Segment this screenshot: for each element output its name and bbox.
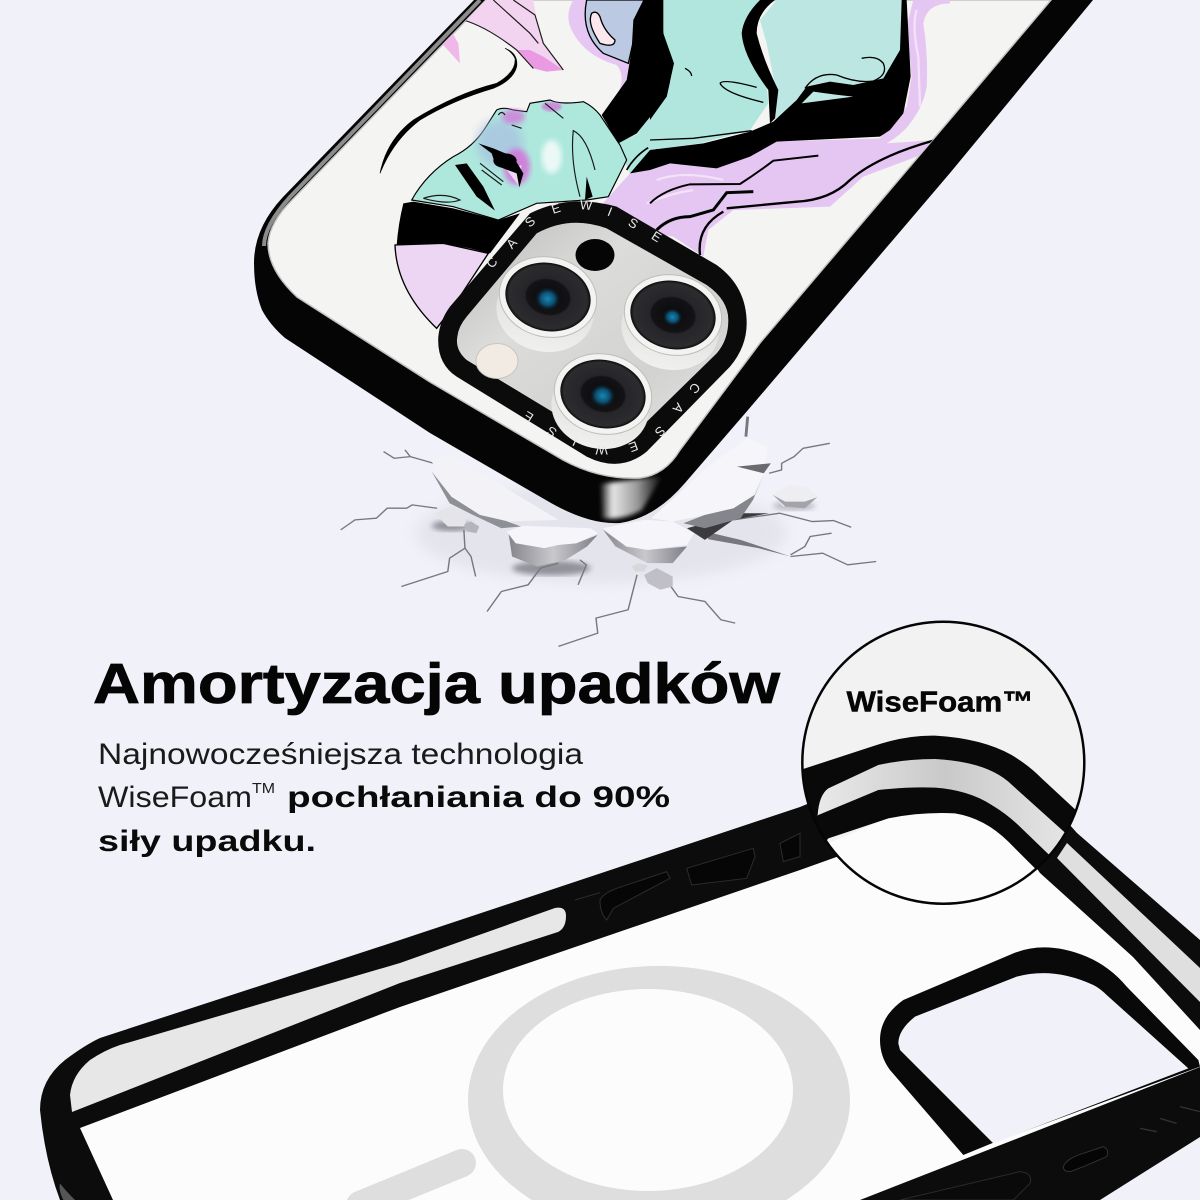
brand text top: CASEWISE bbox=[483, 197, 664, 271]
hair strands on lilac bbox=[650, 156, 818, 203]
magnified clear strip bbox=[818, 759, 1072, 862]
bottom case, inside view bbox=[40, 745, 1200, 1200]
bumper highlight bbox=[600, 476, 662, 519]
centre strand bbox=[742, 0, 778, 123]
magnified inner band bbox=[815, 787, 1049, 868]
magnified outer band bbox=[804, 736, 1075, 832]
lower hair band bbox=[397, 202, 520, 253]
metallic bevel bbox=[264, 0, 480, 246]
lilac hair bbox=[600, 0, 950, 257]
left strand edge bbox=[650, 0, 674, 120]
left part of illustration bbox=[380, 0, 670, 253]
side buttons bbox=[575, 833, 800, 920]
left black strand bbox=[602, 0, 670, 143]
hair wisp bbox=[380, 48, 517, 173]
hand bbox=[463, 0, 563, 72]
case bumper bbox=[254, 0, 1093, 523]
top phone in case bbox=[254, 0, 1093, 523]
clear side strip right bbox=[1057, 843, 1200, 1002]
cutout opening bbox=[898, 973, 1188, 1143]
lilac lower hair left bbox=[395, 243, 488, 328]
description text: Najnowocześniejsza technologia bbox=[98, 738, 583, 771]
body skin bbox=[637, 0, 768, 150]
magnifier circle bbox=[795, 622, 1088, 915]
case frame bbox=[40, 745, 1200, 1200]
neck skin bbox=[619, 134, 670, 174]
magnifier outline bbox=[802, 622, 1084, 904]
shoulder bbox=[585, 0, 647, 63]
printed back panel bbox=[268, 0, 1051, 478]
magnifier fill bbox=[802, 622, 1084, 904]
flash bbox=[476, 344, 518, 378]
face shading bbox=[477, 120, 523, 167]
neck halo bbox=[568, 0, 637, 115]
camera cutout bbox=[880, 947, 1200, 1200]
brand text bottom: CASEWISE bbox=[521, 380, 704, 458]
corner port bbox=[60, 1183, 75, 1200]
main hair bbox=[630, 0, 911, 173]
cutout frame bbox=[880, 947, 1200, 1155]
title: Amortyzacja upadków bbox=[93, 652, 781, 716]
description text: TM bbox=[252, 780, 275, 797]
cracked floor bbox=[341, 417, 876, 646]
lower band buttons bbox=[1063, 1147, 1108, 1172]
magnified panel bbox=[829, 813, 1034, 902]
magnetic ring bbox=[468, 966, 850, 1200]
crescent highlight bbox=[802, 92, 853, 103]
description text: WiseFoam bbox=[98, 781, 252, 814]
face bbox=[412, 100, 627, 220]
lens 3 bbox=[544, 345, 659, 458]
right part of illustration bbox=[600, 0, 950, 257]
description text: pochłaniania do 90% bbox=[287, 781, 670, 814]
illustration: woman with flowing hair bbox=[380, 0, 950, 328]
island frame bbox=[438, 201, 747, 464]
description text: siły upadku. bbox=[98, 825, 316, 858]
eye and brow bbox=[455, 163, 495, 211]
description text bbox=[98, 738, 670, 858]
clear side strip left bbox=[70, 908, 566, 1112]
clear back panel bbox=[80, 819, 1200, 1200]
lens 2 bbox=[614, 266, 729, 379]
camera island bbox=[438, 197, 747, 464]
body line details bbox=[650, 57, 885, 140]
lidar bbox=[576, 239, 614, 271]
lens 1 bbox=[489, 248, 604, 361]
ring stem bbox=[360, 1163, 462, 1200]
magnifier label: WiseFoam™ bbox=[846, 687, 1034, 719]
island opening bbox=[457, 223, 728, 440]
magnified case corner bbox=[804, 736, 1075, 902]
